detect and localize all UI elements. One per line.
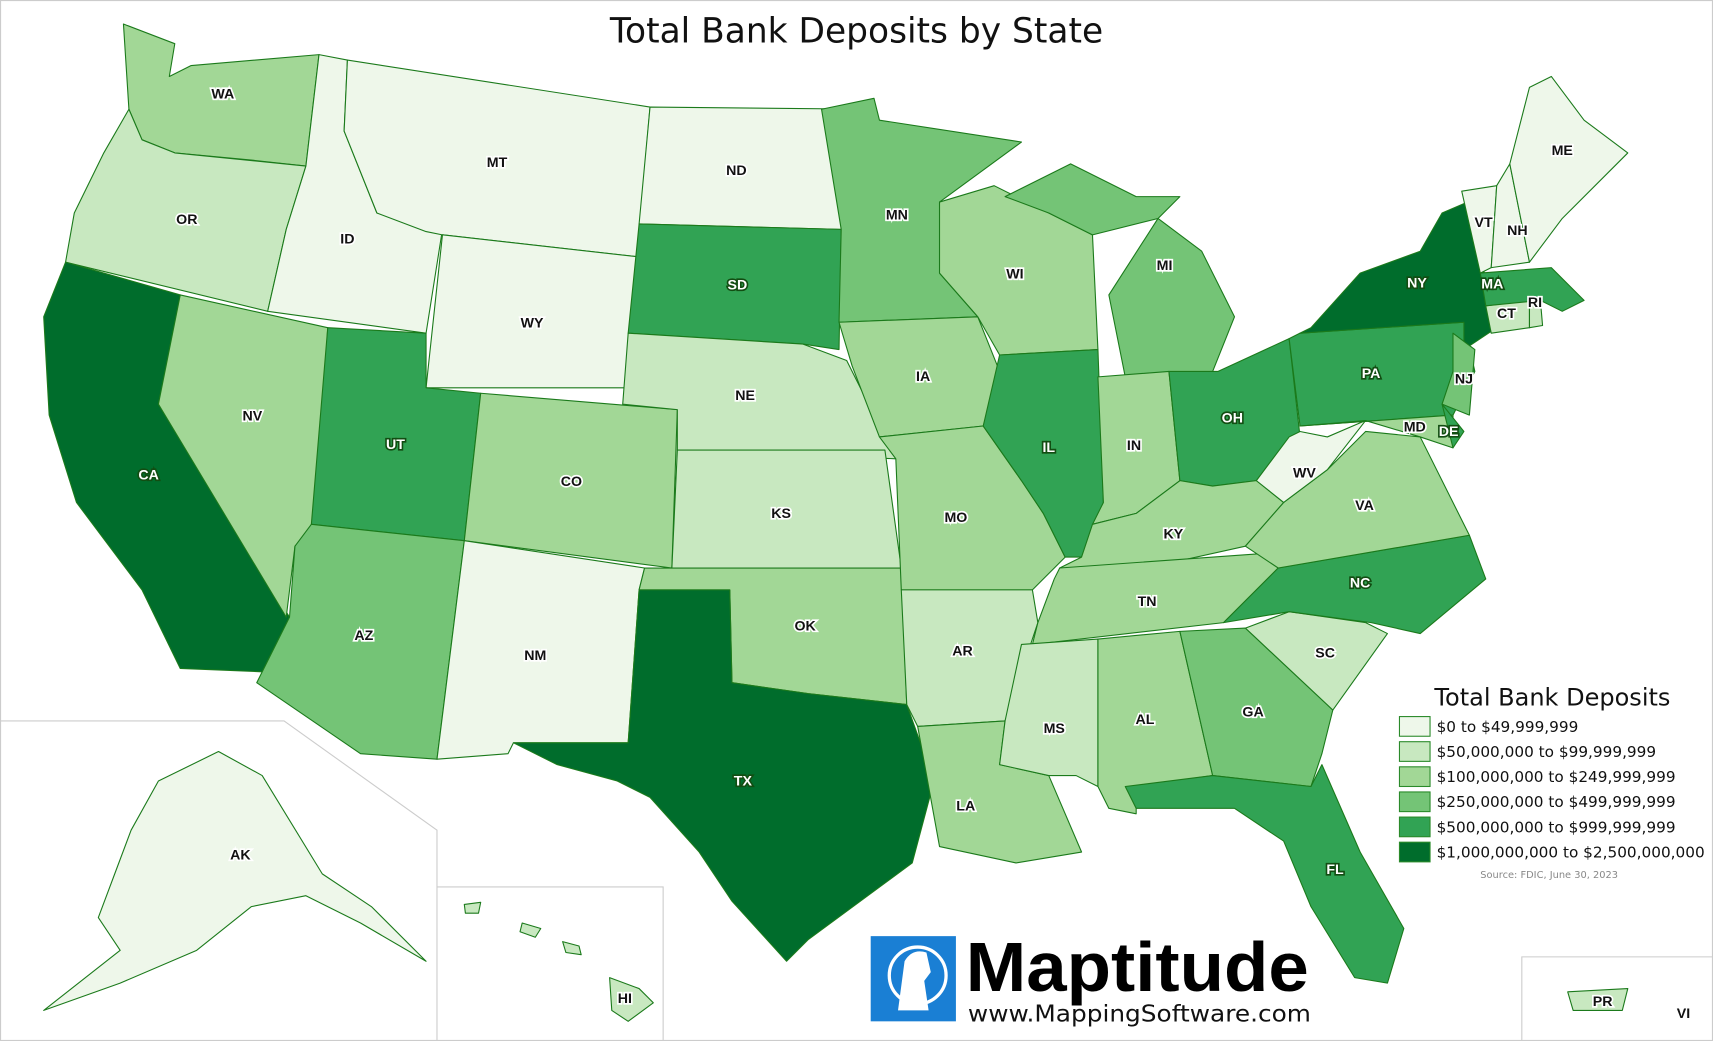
state labels: TN xyxy=(1138,594,1157,610)
state labels: MD xyxy=(1404,419,1426,435)
state labels: WV xyxy=(1293,465,1316,481)
state labels: NH xyxy=(1507,223,1528,239)
state labels: OK xyxy=(795,618,817,634)
state labels: MO xyxy=(944,510,967,526)
state labels: ID xyxy=(340,232,355,248)
state labels: GA xyxy=(1242,705,1264,721)
state labels: IN xyxy=(1127,438,1141,454)
legend: Source: FDIC, June 30, 2023 xyxy=(1480,870,1618,881)
state labels: SD xyxy=(728,277,747,293)
state labels: LA xyxy=(956,799,975,815)
state labels: UT xyxy=(386,437,405,453)
state labels: TX xyxy=(734,773,752,789)
state labels: OH xyxy=(1222,411,1243,427)
state labels: MT xyxy=(487,155,508,171)
state labels: ND xyxy=(726,163,747,179)
state labels: NJ xyxy=(1455,371,1473,387)
legend xyxy=(1399,684,1705,881)
state labels: VI xyxy=(1677,1006,1690,1022)
legend: $0 to $49,999,999 xyxy=(1437,718,1578,736)
state labels: MN xyxy=(886,208,908,224)
legend: Total Bank Deposits xyxy=(1433,684,1670,712)
state labels: AL xyxy=(1135,712,1155,728)
inset frames xyxy=(0,721,1713,1041)
legend: $1,000,000,000 to $2,500,000,000 xyxy=(1437,843,1705,861)
legend: $50,000,000 to $99,999,999 xyxy=(1437,743,1656,761)
state labels: KY xyxy=(1163,527,1184,543)
legend: $500,000,000 to $999,999,999 xyxy=(1437,818,1676,836)
logo xyxy=(871,928,1311,1027)
state labels: WA xyxy=(211,86,234,102)
logo: www.MappingSoftware.com xyxy=(968,1001,1311,1027)
state labels: NV xyxy=(243,409,263,425)
state labels: MI xyxy=(1157,258,1172,274)
state labels: DE xyxy=(1439,424,1458,440)
state labels: NC xyxy=(1350,576,1370,592)
logo: Maptitude xyxy=(966,928,1309,1006)
state labels: IA xyxy=(916,369,930,385)
state labels: IL xyxy=(1042,440,1055,456)
state labels: CT xyxy=(1497,306,1516,322)
state labels: NY xyxy=(1407,275,1427,291)
state labels: VT xyxy=(1475,215,1493,231)
state labels: AR xyxy=(952,643,973,659)
state labels: MS xyxy=(1044,721,1065,737)
state labels: WI xyxy=(1006,267,1024,283)
state labels: NE xyxy=(735,388,755,404)
legend: $100,000,000 to $249,999,999 xyxy=(1437,768,1676,786)
state labels: ME xyxy=(1552,143,1573,159)
title: Total Bank Deposits by State xyxy=(609,12,1103,52)
state labels: PR xyxy=(1593,994,1613,1010)
state labels: SC xyxy=(1315,646,1335,662)
state labels: CA xyxy=(138,468,159,484)
legend: $250,000,000 to $499,999,999 xyxy=(1437,793,1676,811)
state labels: VA xyxy=(1355,498,1374,514)
state labels: RI xyxy=(1528,295,1542,311)
state labels: PA xyxy=(1362,366,1380,382)
state labels: AZ xyxy=(354,628,374,644)
state labels: NM xyxy=(524,648,546,664)
state labels: OR xyxy=(176,212,197,228)
state labels: AK xyxy=(230,848,251,864)
state labels: MA xyxy=(1481,276,1503,292)
state labels: HI xyxy=(618,991,632,1007)
state labels: FL xyxy=(1326,862,1344,878)
state labels: WY xyxy=(521,316,544,332)
state labels: CO xyxy=(561,474,582,490)
state labels: KS xyxy=(771,506,791,522)
